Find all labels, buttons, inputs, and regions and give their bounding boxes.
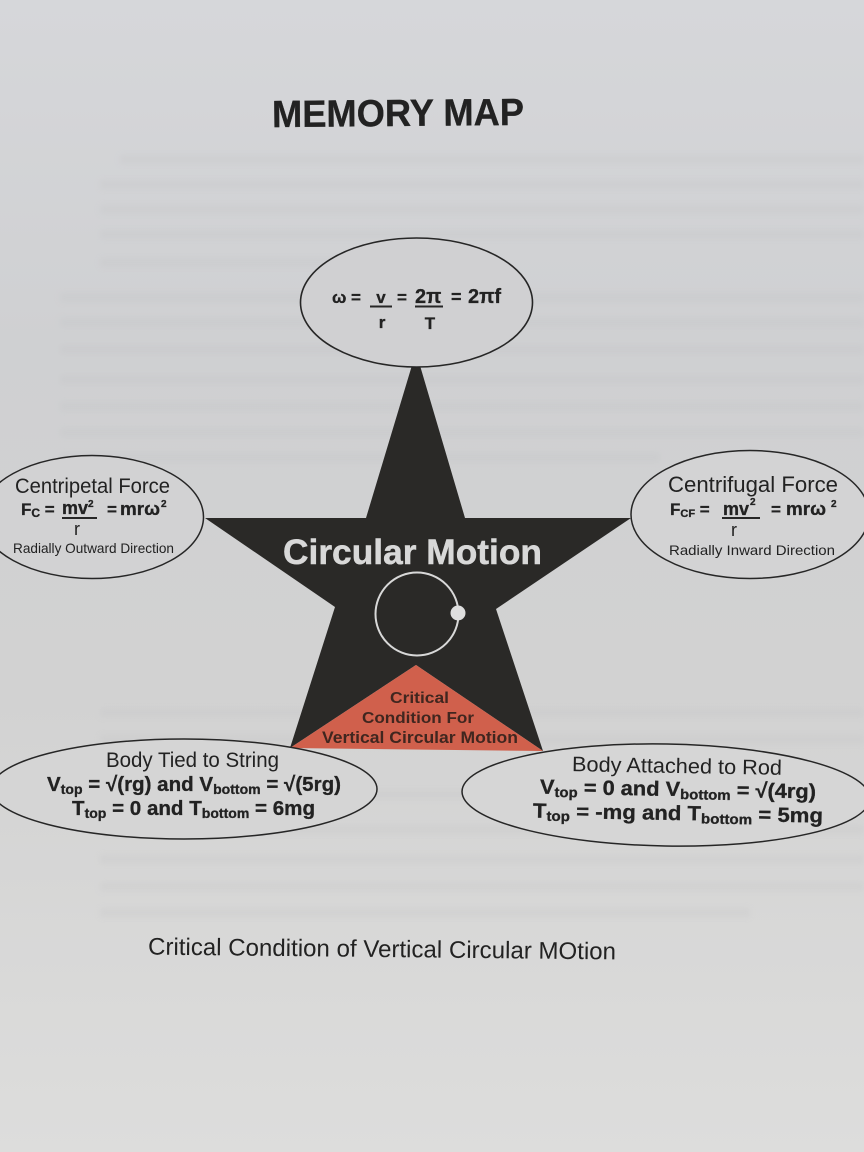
panel: body tied to string: bottom bbox=[213, 781, 261, 797]
panel: centrifugal force: mrω bbox=[786, 499, 826, 519]
panel: centrifugal force: CF bbox=[680, 508, 695, 520]
icon: circular orbit bbox=[376, 572, 466, 656]
panel: body attached to rod: bottom bbox=[680, 786, 731, 803]
panel: body attached to rod bbox=[461, 740, 864, 850]
panel: body tied to string: V bbox=[47, 773, 61, 796]
panel: critical condition triangle: Condition For bbox=[362, 710, 474, 727]
panel: centrifugal force: 2 bbox=[750, 497, 756, 508]
panel: body attached to rod: Body Attached to Rod bbox=[572, 753, 782, 780]
panel: centrifugal force: = bbox=[771, 500, 781, 519]
panel: centripetal force: 2 bbox=[88, 499, 94, 510]
panel: body tied to string: = √(5rg) bbox=[261, 773, 341, 796]
panel: angular velocity formula: = bbox=[397, 288, 407, 307]
panel: body attached to rod: = 0 and V bbox=[578, 776, 681, 801]
panel: angular velocity formula: 2πf bbox=[468, 286, 501, 308]
panel: centrifugal force: = bbox=[695, 500, 710, 519]
panel: centrifugal force: r bbox=[731, 520, 737, 540]
panel: body tied to string: T bbox=[72, 797, 85, 820]
panel: body tied to string: bottom bbox=[202, 805, 249, 821]
panel: body attached to rod: = -mg and T bbox=[570, 800, 702, 825]
panel: centrifugal force: 2 bbox=[831, 499, 837, 510]
panel: body attached to rod: V bbox=[540, 776, 554, 799]
panel: centripetal force: = bbox=[40, 500, 55, 519]
panel: critical condition triangle: Critical bbox=[390, 690, 449, 707]
panel: body tied to string: = 6mg bbox=[249, 797, 315, 820]
panel: angular velocity formula: r bbox=[379, 313, 386, 332]
panel: centrifugal force: F bbox=[670, 500, 680, 519]
panel: body attached to rod: = √(4rg) bbox=[730, 779, 816, 803]
panel: centripetal force: r bbox=[74, 519, 80, 539]
panel: angular velocity formula: T bbox=[425, 314, 436, 333]
panel: centrifugal force: Centrifugal Force bbox=[668, 472, 838, 497]
panel: angular velocity formula: v bbox=[376, 288, 386, 307]
panel: body attached to rod: T bbox=[533, 799, 546, 823]
panel: critical condition triangle bbox=[290, 665, 543, 751]
title: MEMORY MAP bbox=[272, 92, 524, 136]
panel: centripetal force: F bbox=[21, 500, 31, 519]
panel: body attached to rod: top bbox=[546, 808, 570, 824]
panel: critical condition triangle: Vertical Circular Motion bbox=[322, 729, 518, 747]
caption: Critical Condition of Vertical Circular MOtion bbox=[148, 934, 616, 965]
panel: body tied to string: Body Tied to String bbox=[106, 749, 279, 772]
panel: centripetal force: mrω bbox=[120, 499, 160, 519]
panel: centripetal force: Radially Outward Direction bbox=[13, 540, 174, 556]
panel: body attached to rod: = 5mg bbox=[752, 803, 823, 828]
panel: centripetal force bbox=[0, 456, 204, 578]
panel: body tied to string: = 0 and T bbox=[106, 797, 202, 820]
panel: body tied to string: top bbox=[85, 805, 106, 821]
star: Circular Motion bbox=[205, 352, 631, 751]
panel: body attached to rod: bottom bbox=[701, 810, 752, 827]
panel: body tied to string: = √(rg) and V bbox=[83, 773, 213, 796]
panel: angular velocity formula bbox=[300, 238, 532, 367]
panel: centripetal force: = bbox=[107, 500, 117, 519]
panel: angular velocity formula: 2π bbox=[415, 286, 441, 308]
panel: centripetal force: 2 bbox=[161, 499, 167, 510]
panel: centripetal force: C bbox=[31, 506, 40, 520]
panel: angular velocity formula: = bbox=[351, 288, 361, 307]
panel: centripetal force: mv bbox=[62, 498, 88, 518]
panel: centrifugal force bbox=[631, 450, 864, 578]
star heading: Circular Motion bbox=[283, 533, 542, 572]
panel: angular velocity formula: ω bbox=[332, 288, 346, 307]
panel: centrifugal force: Radially Inward Direction bbox=[669, 542, 835, 558]
panel: body tied to string: top bbox=[61, 781, 83, 797]
panel: angular velocity formula: = bbox=[451, 287, 462, 307]
panel: body attached to rod: top bbox=[554, 784, 578, 800]
panel: centrifugal force: mv bbox=[723, 499, 749, 519]
panel: body tied to string bbox=[0, 739, 377, 839]
panel: centripetal force: Centripetal Force bbox=[15, 475, 170, 498]
